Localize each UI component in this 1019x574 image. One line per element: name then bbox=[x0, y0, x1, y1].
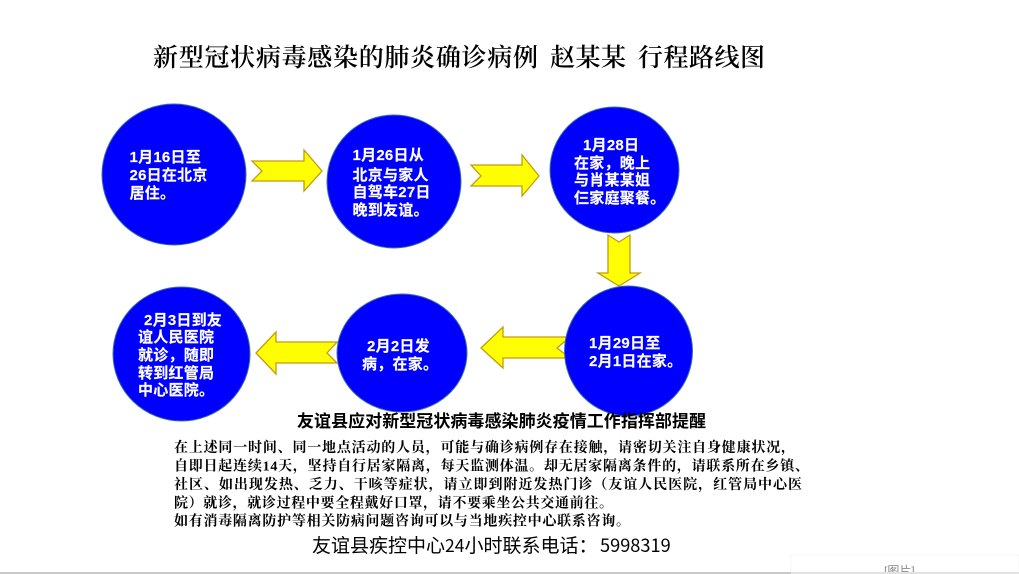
arrow: step 1 to 2 bbox=[252, 150, 322, 191]
step 5: text: 病，在家。 bbox=[362, 353, 438, 374]
arrow: step 5 to 6 bbox=[256, 332, 337, 374]
notice body text: 自即日起连续14天，坚持自行居家隔离，每天监测体温。却无居家隔离条件的，请联系所在乡镇、 bbox=[174, 458, 809, 474]
step 4: text: 1月29日至 bbox=[589, 335, 661, 352]
notice body text: 院）就诊，就诊过程中要全程戴好口罩，请不要乘坐公共交通前往。 bbox=[174, 494, 613, 512]
arrow: step 2 to 3 bbox=[471, 155, 539, 196]
step 1: text: 居住。 bbox=[130, 184, 175, 202]
title: 赵某某 bbox=[550, 44, 626, 72]
step 3: text: 与肖某某姐 bbox=[574, 172, 650, 189]
step 2: text: 1月26日从 bbox=[352, 147, 424, 164]
step 3: text: 在家，晚上 bbox=[574, 152, 650, 173]
notice heading: 友谊县应对新型冠状病毒感染肺炎疫情工作指挥部提醒 bbox=[297, 411, 706, 431]
step 2: text: 自驾车27日 bbox=[352, 183, 431, 201]
step 6: circle bbox=[113, 287, 250, 421]
notice body text: 在上述同一时间、同一地点活动的人员，可能与确诊病例存在接触，请密切关注自身健康状况， bbox=[174, 439, 795, 456]
notice body text: 如有消毒隔离防护等相关防病问题咨询可以与当地疾控中心联系咨询。 bbox=[174, 512, 630, 530]
step 6: text: 就诊，随即 bbox=[138, 344, 214, 365]
title: 行程路线图 bbox=[638, 44, 765, 72]
step 1: text: 26日在北京 bbox=[130, 166, 208, 184]
step 6: text: 谊人民医院 bbox=[138, 328, 214, 346]
arrow: step 3 to 4 bbox=[598, 235, 640, 286]
image caption box bbox=[791, 555, 1019, 574]
step 6: text: 2月3日到友 bbox=[144, 311, 222, 329]
step 5: text: 2月2日发 bbox=[367, 337, 430, 355]
step 1: text: 1月16日至 bbox=[130, 149, 201, 166]
arrow: step 4 to 5 bbox=[481, 327, 570, 368]
title bbox=[153, 44, 765, 72]
step 5: circle bbox=[337, 294, 467, 412]
step 6: text: 中心医院。 bbox=[138, 381, 214, 399]
contact phone line: 5998319 bbox=[600, 532, 671, 558]
step 1: circle bbox=[102, 104, 246, 245]
notice body text: 社区、如出现发热、乏力、干咳等症状，请立即到附近发热门诊（友谊人民医院，红管局中心医 bbox=[174, 476, 802, 493]
title: 新型冠状病毒感染的肺炎确诊病例 bbox=[153, 44, 538, 72]
step 6: text: 转到红管局 bbox=[138, 364, 214, 382]
step 2: text: 北京与家人 bbox=[352, 166, 429, 184]
step 3: text: 1月28日 bbox=[583, 137, 639, 154]
step 2: circle bbox=[327, 115, 461, 248]
notice body text bbox=[174, 439, 809, 530]
step 4: text: 2月1日在家。 bbox=[589, 352, 682, 370]
contact phone line: 友谊县疾控中心24小时联系电话： bbox=[312, 531, 597, 558]
step 3: text: 仨家庭聚餐。 bbox=[574, 189, 666, 207]
step 4: circle bbox=[564, 286, 692, 416]
bottom window edge bbox=[0, 572, 1019, 574]
step 2: text: 晚到友谊。 bbox=[352, 201, 429, 219]
step 3: circle bbox=[550, 107, 679, 233]
